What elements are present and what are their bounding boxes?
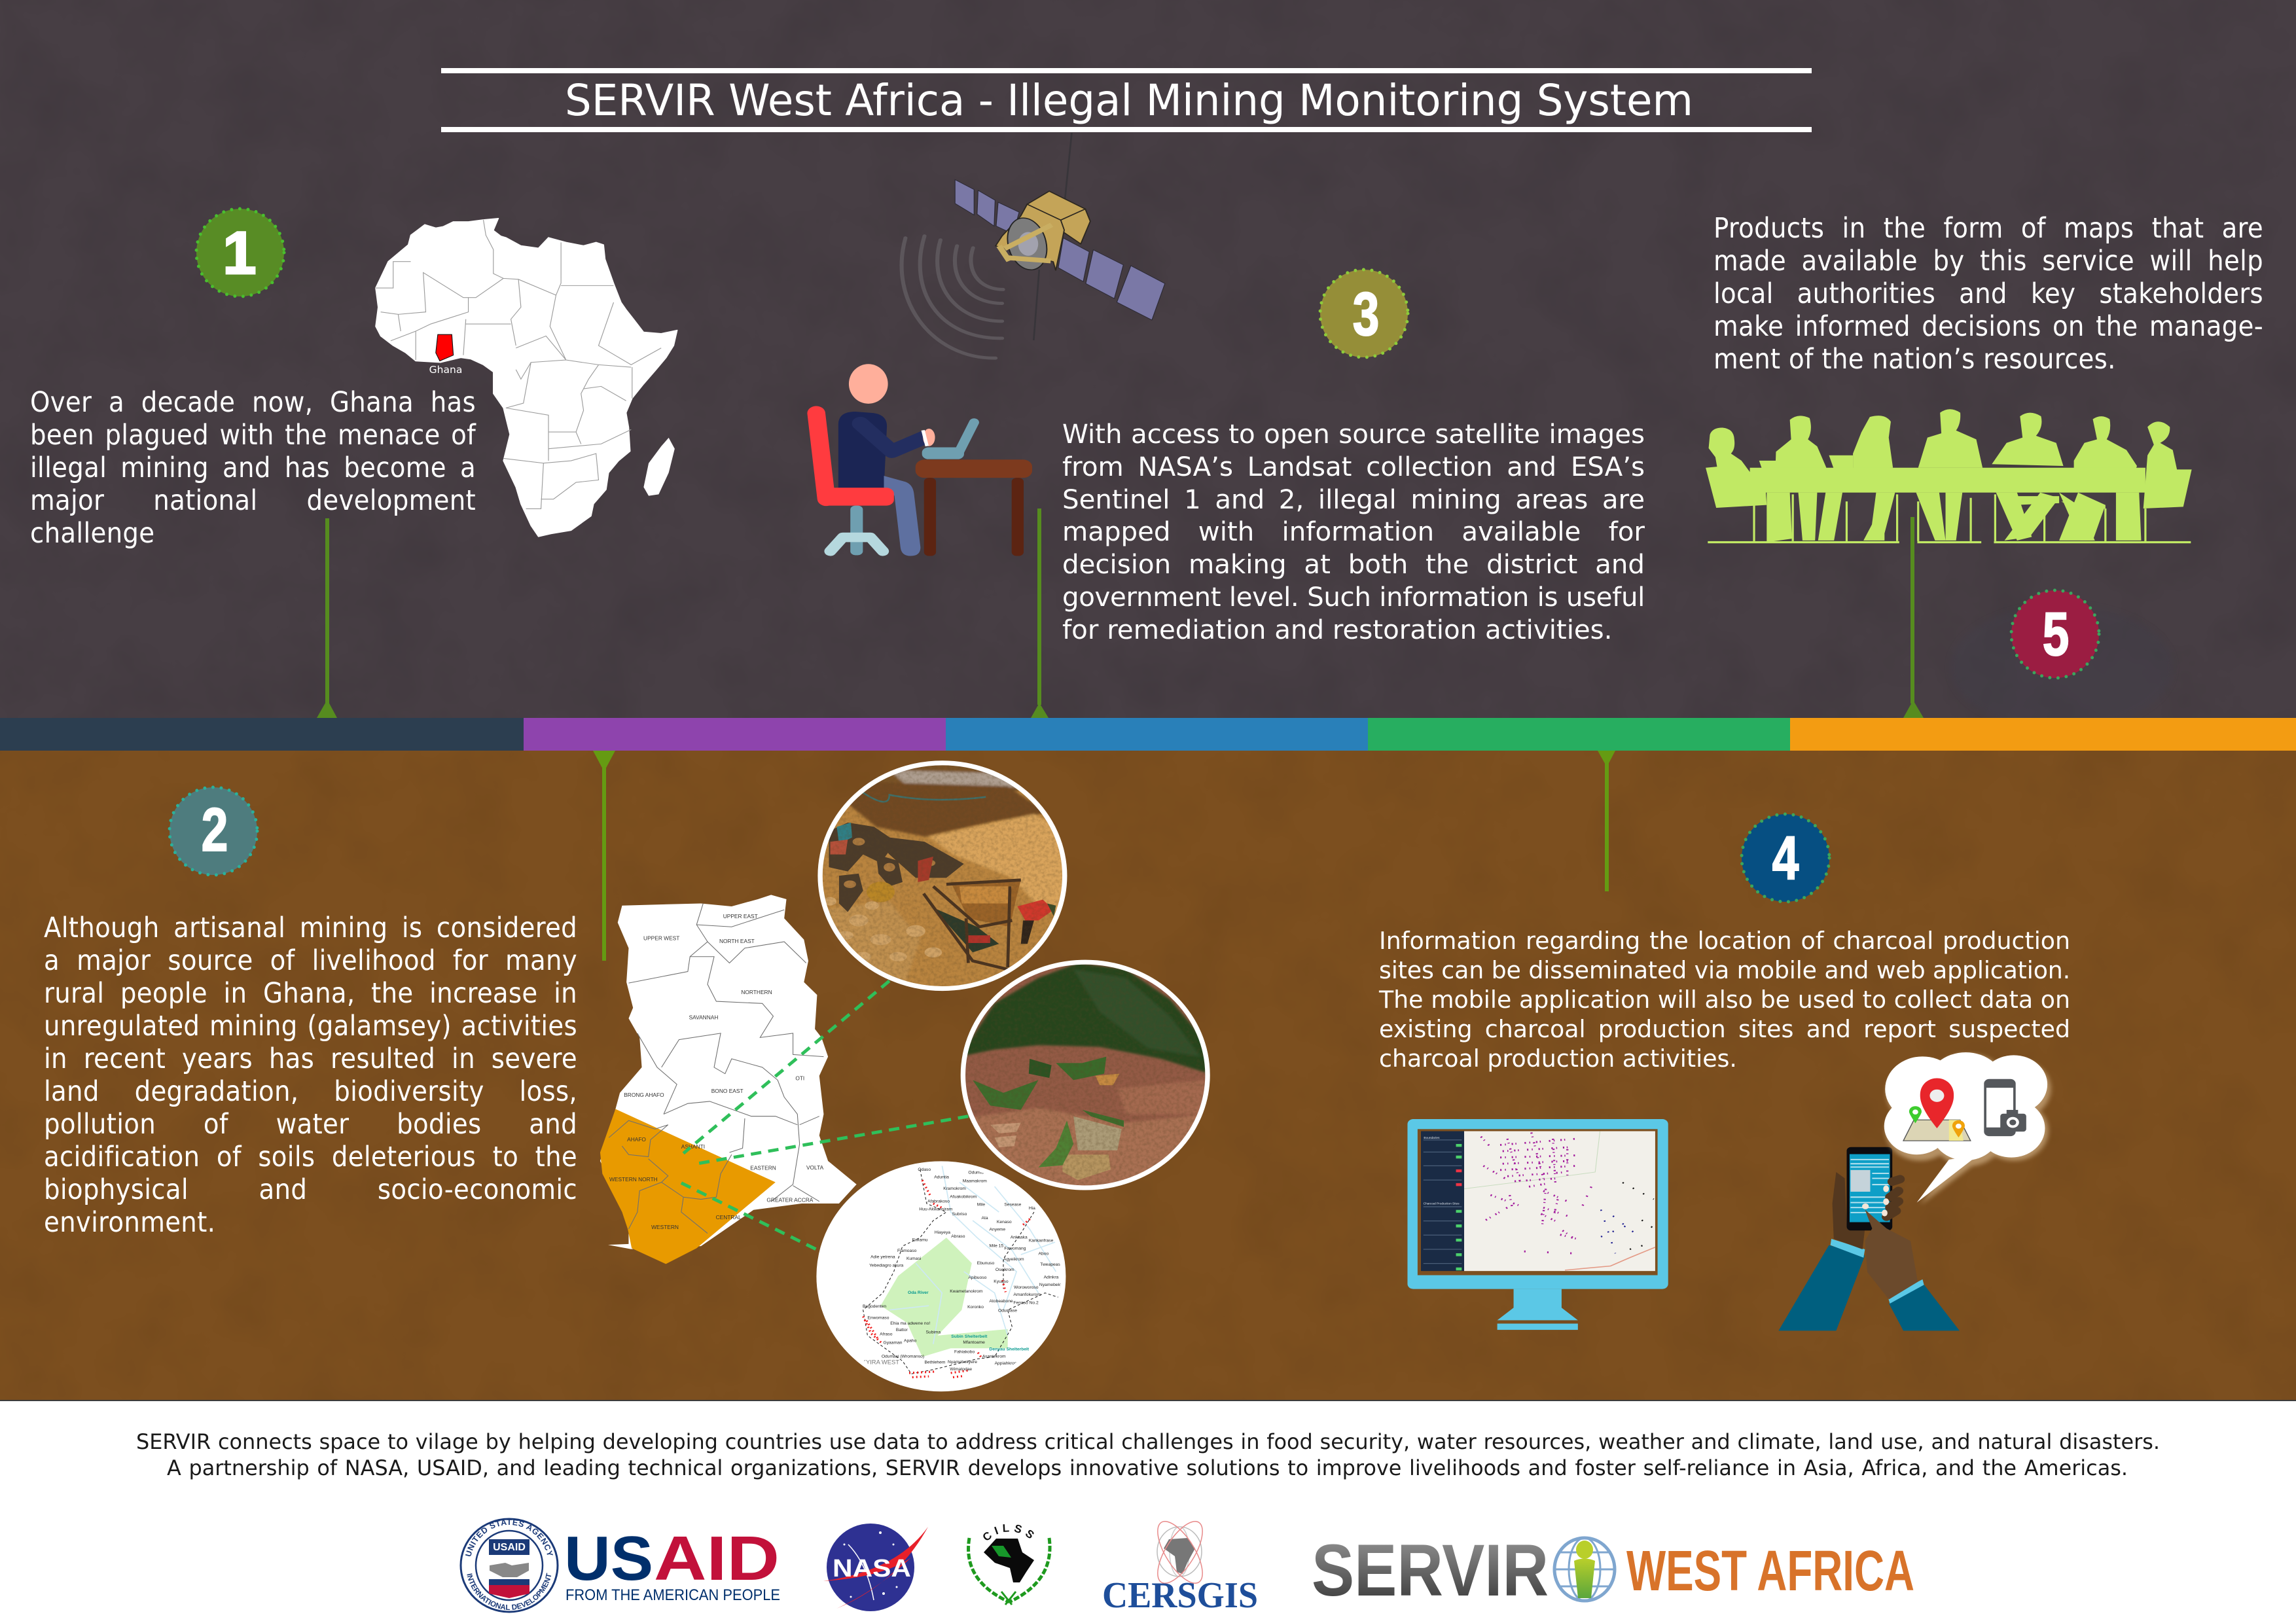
logo: CERSGIS [1102, 1515, 1258, 1616]
text block: step 5: made available by this service will help [1713, 245, 2263, 277]
map: forest reserve mining sites: Afuakobikrom [950, 1195, 977, 1200]
logo: CILSS: CILSS [983, 1524, 1034, 1541]
text block: step 2: in recent years has resulted in severe [44, 1043, 577, 1075]
map: forest reserve mining sites: Asantekrom [982, 1355, 1006, 1359]
text block: step 3 [1062, 419, 1645, 645]
map: forest reserve mining sites: Nyamebekyere [1039, 1283, 1069, 1287]
map: forest reserve mining sites: Ankaaka [1011, 1235, 1028, 1240]
map: Ghana regions: VOLTA [806, 1165, 824, 1171]
map: forest reserve mining sites: Mile [977, 1202, 985, 1207]
text block: step 1 [30, 386, 476, 550]
timeline colour strip [0, 718, 2296, 751]
map: forest reserve mining sites: Anyeme [990, 1228, 1005, 1232]
text block: step 3: Sentinel 1 and 2, illegal mining areas are [1062, 484, 1645, 515]
text block: step 2: pollution of water bodies and [44, 1108, 577, 1141]
map: forest reserve mining sites: Subima [925, 1330, 941, 1334]
text block: step 2 [44, 912, 577, 1239]
signal waves [902, 236, 1003, 358]
logo: USAID wordmark: FROM THE AMERICAN PEOPLE [565, 1586, 780, 1604]
arrow: step 1 connector [317, 518, 337, 718]
logo: USAID seal: USAID [493, 1542, 526, 1553]
title rule lines [441, 68, 1812, 132]
map: Ghana regions: UPPER WEST [643, 935, 679, 941]
text block: step 5: local authorities and key stakeholders [1713, 277, 2263, 310]
map: Ghana regions: AHAFO [627, 1137, 647, 1143]
text block: step 2: a major source of livelihood for many [44, 944, 577, 977]
map: forest reserve mining sites: Maamakrom [963, 1179, 987, 1183]
arrow: step 3 connector [1031, 508, 1049, 718]
text block: step 2: acidification of soils deleterious to the [44, 1141, 577, 1173]
map: forest reserve mining sites: Mile 15 [990, 1243, 1003, 1248]
logo: SERVIR wordmark: SERVIR [1312, 1529, 1549, 1611]
map: Ghana regions: WESTERN [651, 1224, 679, 1230]
map: Africa with Ghana highlighted: Ghana [429, 364, 462, 376]
text block: step 3: government level. Such information is useful [1062, 582, 1645, 613]
badge: number 3 [1320, 270, 1408, 357]
badge: number 5: 5 [2043, 599, 2069, 668]
map: forest reserve mining sites: Odumasi (Wromanso) [882, 1355, 924, 1359]
text block: step 5: ment of the nation’s resources. [1713, 343, 2116, 376]
logo: NASA [823, 1524, 928, 1611]
map: forest reserve mining sites: KYIRA WEST [862, 1359, 899, 1365]
text block: step 2: land degradation, biodiversity loss, [44, 1075, 577, 1108]
text block: step 4: The mobile application will also be used to collect data on [1379, 986, 2070, 1014]
map: Ghana regions: BRONG AHAFO [624, 1092, 664, 1098]
text block: step 1: been plagued with the menace of [30, 419, 476, 452]
map: forest reserve mining sites: Odaso [918, 1168, 931, 1172]
map: Ghana regions: GREATER ACCRA [766, 1198, 814, 1203]
map: forest reserve mining sites: Odumto [968, 1171, 984, 1175]
arrow: step 2 connector [593, 751, 615, 961]
map: forest reserve mining sites: Hia [1029, 1206, 1035, 1211]
map: forest reserve mining sites: Aboo [1039, 1252, 1049, 1257]
badge: number 2 [170, 787, 257, 875]
footer: SERVIR description [136, 1429, 2160, 1480]
text block: step 2: Although artisanal mining is considered [44, 912, 577, 944]
map: forest reserve mining sites: Wimatodae [950, 1367, 972, 1372]
logo: SERVIR globe [1554, 1538, 1615, 1601]
illustration: web application on monitor: Boundaries [1424, 1136, 1440, 1139]
panel: dark upper background [0, 0, 2296, 730]
footer: SERVIR description: A partnership of NASA, USAID, and leading technical organizations, SERVIR develops innovative solutions to improve livelihoods and foster self-reliance in Asia, Africa, and the Americas. [167, 1455, 2128, 1480]
text block: step 3: mapped with information available for [1062, 516, 1645, 547]
text block: step 3: With access to open source satellite images [1062, 419, 1645, 450]
map: forest reserve mining sites: Begodenten [863, 1304, 886, 1309]
dashed connector lines [675, 981, 968, 1249]
logo: USAID wordmark: AID [654, 1524, 780, 1594]
text block: step 5 [1713, 212, 2263, 376]
map: Ghana regions: CENTRAL [716, 1215, 742, 1221]
map: forest reserve mining sites: Amanfokurom [1013, 1293, 1041, 1297]
text block: step 2: unregulated mining (galamsey) activities [44, 1010, 577, 1043]
illustration: satellite with signal waves [902, 133, 1165, 358]
map: forest reserve mining sites: Bethlehem [924, 1361, 946, 1365]
map: Ghana regions: NORTH EAST [719, 938, 755, 944]
text block: step 2: environment. [44, 1206, 215, 1239]
map: forest reserve mining sites: Denyau Shelterbelt [990, 1347, 1030, 1351]
logo: WEST AFRICA wordmark: WEST AFRICA [1626, 1539, 1914, 1603]
text block: step 3: from NASA’s Landsat collection and ESA’s [1062, 452, 1645, 482]
map: forest reserve mining sites: Apaho [904, 1339, 917, 1343]
panel: brown lower background [0, 749, 2296, 1400]
map: Ghana regions [600, 895, 857, 1264]
map: forest reserve mining sites: Oseikrom [996, 1268, 1014, 1272]
map: Africa with Ghana highlighted [376, 219, 677, 537]
map: forest reserve mining sites: Kenaso [997, 1220, 1012, 1224]
badge: number 5 [2011, 590, 2099, 678]
map: forest reserve mining sites: Adinkra [1044, 1275, 1059, 1280]
logo: CILSS [967, 1524, 1051, 1605]
illustration: web application on monitor [1407, 1119, 1668, 1330]
illustration: web application on monitor: Charcoal Production Sites [1424, 1202, 1460, 1205]
logo: NASA: NASA [833, 1555, 911, 1582]
map: forest reserve mining sites: Fahiakobo [954, 1349, 975, 1354]
map: forest reserve mining sites: Abraso [951, 1234, 965, 1239]
map: forest reserve mining sites: Ata [982, 1216, 988, 1221]
map: forest reserve mining sites: Kankanfrase [1029, 1239, 1054, 1243]
map: forest reserve mining sites: Battor [896, 1328, 908, 1332]
photo: artisanal miners at sluice [815, 757, 1069, 995]
map: forest reserve mining sites: Kumasi [906, 1257, 922, 1261]
text block: step 2: rural people in Ghana, the increase in [44, 977, 577, 1010]
text block: step 4: sites can be disseminated via mobile and web application. [1379, 956, 2070, 984]
text block: step 4: charcoal production activities. [1379, 1044, 1737, 1073]
map: Ghana regions: WESTERN NORTH [609, 1177, 658, 1183]
text block: step 2: biophysical and socio-economic [44, 1173, 577, 1206]
map: forest reserve mining sites: Atobeabone [990, 1299, 1013, 1304]
map: forest reserve mining sites: Ehia ma adwene no! [890, 1321, 930, 1326]
map: Ghana regions: EASTERN [750, 1166, 776, 1171]
text block: step 4: existing charcoal production sites and report suspected [1379, 1015, 2070, 1043]
arrow: step 5 connector [1903, 517, 1924, 718]
map: forest reserve mining sites: Sesease [1004, 1202, 1022, 1207]
text block: step 5: make informed decisions on the manage- [1713, 310, 2263, 343]
map: forest reserve mining sites: Kwametanokrom [950, 1289, 983, 1294]
map: forest reserve mining sites: Hiayeya [935, 1230, 950, 1235]
logo: CERSGIS: CERSGIS [1102, 1575, 1258, 1616]
badge: number 4: 4 [1772, 823, 1799, 892]
map: forest reserve mining sites: Subriso [952, 1212, 967, 1217]
map: forest reserve mining sites: Ebunuso [977, 1261, 995, 1266]
text block: step 3: decision making at both the district and [1062, 549, 1645, 580]
map: Ghana regions: ASHANTI [681, 1144, 705, 1150]
illustration: analyst at laptop [816, 364, 1032, 556]
map: forest reserve mining sites: Oda River [908, 1291, 929, 1295]
arrow: step 4 connector [1598, 751, 1615, 891]
map: forest reserve mining sites: Gyaaman [884, 1341, 903, 1346]
map: forest reserve mining sites: Odumase [998, 1308, 1017, 1313]
badge: number 3: 3 [1353, 279, 1379, 348]
text block: step 1: Over a decade now, Ghana has [30, 386, 476, 419]
map: forest reserve mining sites: Kramokrom [943, 1186, 966, 1191]
map: forest reserve mining sites: Huu-Akwansiram [919, 1207, 953, 1211]
map: forest reserve mining sites: Appiahkrom [995, 1361, 1018, 1366]
title: SERVIR West Africa - Illegal Mining Monitoring System [565, 75, 1693, 126]
map: forest reserve mining sites: Fenaso No.2 [1013, 1301, 1039, 1306]
badge: number 2: 2 [202, 795, 228, 864]
logo: USAID seal: UNITED STATES AGENCY [465, 1520, 553, 1556]
map: forest reserve mining sites [817, 1162, 1069, 1391]
map: Ghana regions: SAVANNAH [689, 1014, 718, 1020]
text block: step 3: for remediation and restoration activities. [1062, 615, 1613, 645]
map: forest reserve mining sites: Ewiamu [912, 1238, 928, 1242]
map: forest reserve mining sites: Woroworoso [1014, 1285, 1039, 1290]
text block: step 5: Products in the form of maps that are [1713, 212, 2263, 245]
map: forest reserve mining sites: Aduntia [934, 1175, 949, 1180]
map: forest reserve mining sites: Subin Shelterbelt [951, 1334, 988, 1339]
logo: USAID seal [459, 1518, 559, 1613]
logo: USAID wordmark [564, 1524, 780, 1604]
map: forest reserve mining sites: Adie yetrena [870, 1255, 895, 1259]
map: forest reserve mining sites: Apibuoso [968, 1275, 987, 1280]
map: forest reserve mining sites: Fawomang [1004, 1246, 1026, 1251]
text block: step 1: illegal mining and has become a [30, 452, 476, 484]
illustration: stakeholders meeting silhouette [1706, 409, 2192, 543]
text block: step 1: challenge [30, 517, 154, 550]
map: forest reserve mining sites: Afabrakoso [927, 1200, 950, 1204]
map: forest reserve mining sites: Tweapease [1040, 1262, 1063, 1267]
badge: number 1: 1 [223, 220, 257, 287]
text block: step 4 [1378, 927, 2070, 1073]
map: Ghana regions: UPPER EAST [723, 914, 758, 919]
text block: step 4: Information regarding the location of charcoal production [1379, 927, 2070, 955]
logo: USAID wordmark: US [564, 1524, 653, 1594]
badge: number 4 [1742, 814, 1829, 902]
badge: number 1 [196, 209, 284, 296]
map: Ghana regions: OTI [795, 1076, 804, 1081]
map: Ghana regions: NORTHERN [741, 990, 772, 995]
map: forest reserve mining sites: Koronko [967, 1305, 984, 1310]
map: forest reserve mining sites: Mfantoame [963, 1340, 985, 1345]
footer: SERVIR description: SERVIR connects space to vilage by helping developing countries use data to address critical challenges in food security, water resources, weather and climate, land use, and natural disasters. [136, 1429, 2160, 1454]
map: Ghana regions: BONO EAST [711, 1088, 744, 1094]
map: forest reserve mining sites: Kyuaso [994, 1279, 1009, 1284]
photo: degraded mining landscape [960, 957, 1213, 1195]
map: forest reserve mining sites: Afraso [880, 1332, 893, 1337]
map: forest reserve mining sites: Agyeikrom [1003, 1257, 1024, 1262]
illustration: hands holding phone [1778, 1147, 1960, 1330]
map: forest reserve mining sites: Enwomaso [867, 1315, 889, 1320]
text block: step 1: major national development [30, 484, 476, 517]
map: forest reserve mining sites: Yebediagro akura [869, 1263, 904, 1268]
speech cloud with map pin and camera phone icons [1884, 1052, 2051, 1205]
logo: USAID seal: INTERNATIONAL DEVELOPMENT [467, 1573, 551, 1610]
map: forest reserve mining sites: Nyamebekyere [948, 1360, 977, 1364]
map: forest reserve mining sites: Fiamoaso [897, 1249, 917, 1253]
